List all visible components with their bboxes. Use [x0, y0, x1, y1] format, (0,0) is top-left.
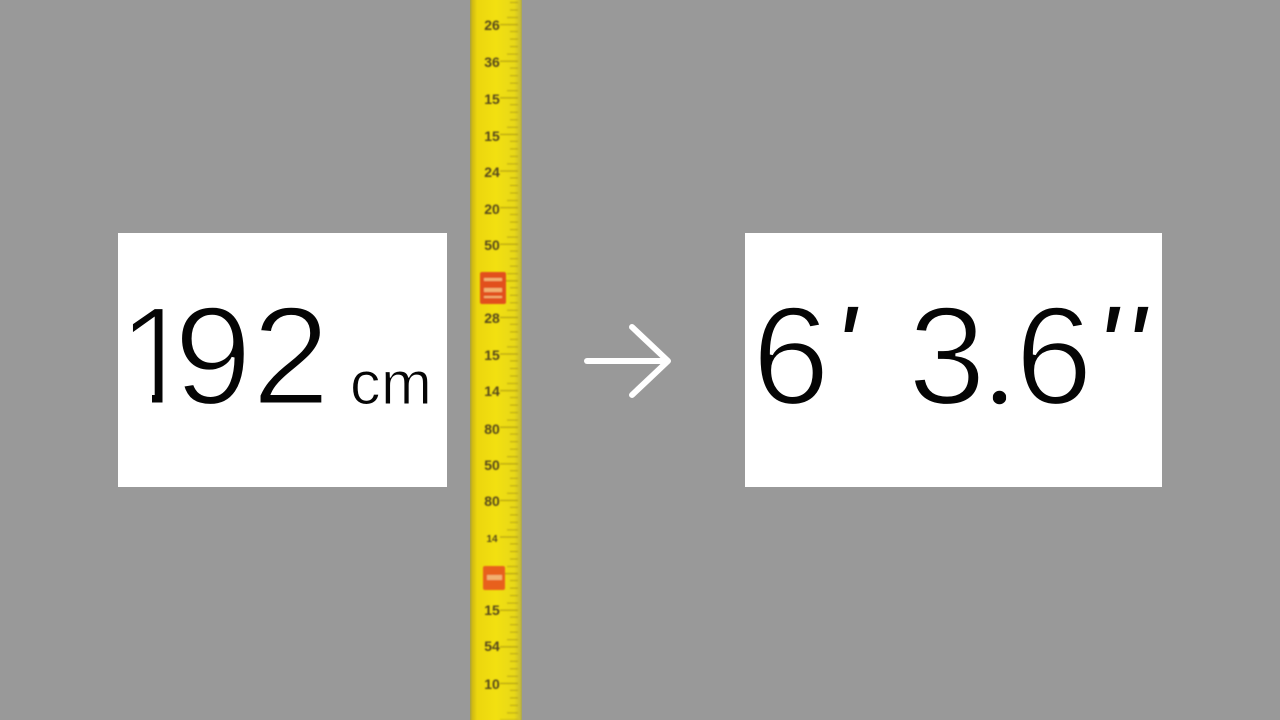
tape scale numbers: 10 [484, 676, 500, 692]
tape scale numbers: 14 [486, 534, 498, 545]
tape red marker: lower [483, 566, 505, 590]
text: 192 cm: 92 [174, 277, 330, 434]
tape scale numbers: 50 [484, 237, 500, 253]
text: 192 cm [132, 308, 428, 404]
tape scale numbers: 14 [484, 383, 500, 399]
panel: centimetres value [118, 233, 447, 487]
text: 6' 3.6": 636 [752, 277, 1093, 434]
tape scale numbers: 26 [484, 17, 500, 33]
tape scale numbers: 15 [484, 347, 500, 363]
text: 6' 3.6": ' [833, 282, 859, 412]
tape scale numbers: 80 [484, 493, 500, 509]
tape scale numbers: 28 [484, 310, 500, 326]
tape scale numbers: 15 [484, 91, 500, 107]
tape scale numbers: 36 [484, 54, 500, 70]
tape scale numbers: 20 [484, 201, 500, 217]
tape scale numbers: 80 [484, 421, 500, 437]
text: 6' 3.6": . [980, 278, 1019, 435]
tape scale numbers [484, 17, 500, 692]
text: 192 cm: 1 [118, 277, 196, 434]
measuring tape [470, 0, 522, 720]
text: 6' 3.6": '' [1095, 282, 1149, 412]
arrow [587, 327, 668, 395]
text: 6' 3.6" [760, 306, 1148, 404]
tape scale numbers: 15 [484, 602, 500, 618]
panel: feet and inches value [745, 233, 1162, 487]
tape scale numbers: 50 [484, 457, 500, 473]
tape scale numbers: 24 [484, 164, 500, 180]
tape scale numbers: 54 [484, 638, 500, 654]
tape red marker: upper [480, 272, 506, 304]
text: 192 cm: cm [350, 349, 432, 417]
tape scale numbers: 15 [484, 128, 500, 144]
